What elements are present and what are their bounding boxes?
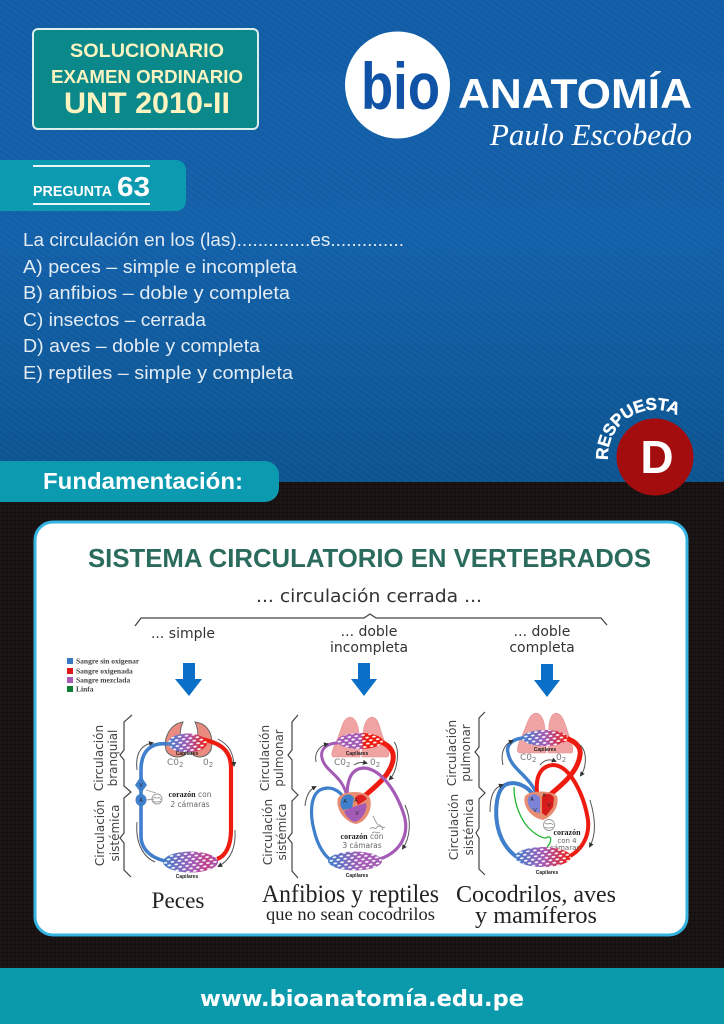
capillary labels: cocodrilos: Capilares — [536, 870, 558, 876]
type labels — [151, 624, 575, 656]
gas labels: peces: 2 — [209, 761, 213, 769]
heart label: anfibios — [341, 832, 384, 850]
side labels: cocodrilos: sistémica — [462, 799, 476, 855]
species label: peces: Peces — [152, 888, 205, 913]
type labels: ... doble — [514, 624, 570, 640]
side labels: anfibios: Circulación — [258, 725, 272, 791]
fundamentación tab — [0, 461, 279, 502]
circuit: cocodrilos — [496, 737, 588, 860]
logo: bioanatomía: ANATOMÍA — [458, 70, 692, 117]
question text: E) reptiles – simple y completa — [23, 363, 294, 383]
side labels: cocodrilos — [445, 720, 476, 860]
legend: Sangre sin oxigenar — [76, 656, 140, 666]
side labels: peces: sistémica — [108, 805, 122, 861]
diagram: anfibios y reptiles — [258, 715, 439, 924]
brace: anfibios — [288, 715, 298, 878]
blue upper background — [0, 0, 724, 483]
exam title box: EXAMEN ORDINARIO — [51, 67, 243, 87]
heart: cocodrilos — [524, 792, 558, 820]
gas labels: cocodrilos — [520, 753, 566, 764]
circuit: anfibios — [312, 738, 406, 861]
capillary labels: cocodrilos — [534, 747, 558, 876]
heart label: peces — [169, 790, 212, 809]
side labels: cocodrilos: Circulación — [447, 794, 461, 860]
dark lower background — [0, 482, 724, 969]
species label: cocodrilos: Cocodrilos, aves — [456, 882, 616, 908]
diagram: cocodrilos, aves y mamíferos — [445, 712, 616, 929]
logo: bioanatomía: bio — [361, 49, 440, 123]
heart: anfibios: A — [343, 799, 347, 805]
body capillaries — [163, 852, 218, 872]
arrow: doble incompleta — [351, 663, 377, 696]
heart chambers: peces: V — [139, 783, 143, 789]
side labels: anfibios: pulmonar — [272, 729, 286, 787]
logo: bioanatomía — [345, 32, 692, 152]
flow arrows: peces — [137, 739, 235, 866]
fundamentación tab: Fundamentación: — [43, 468, 243, 494]
gas labels: peces — [167, 758, 213, 769]
species label: cocodrilos — [456, 882, 616, 929]
heart label: cocodrilos — [550, 828, 581, 852]
side labels: anfibios: sistémica — [275, 804, 289, 860]
side labels: peces — [92, 725, 122, 866]
organ icon: anfibios — [370, 816, 385, 833]
capillary labels: anfibios: Capilares — [346, 873, 368, 879]
question number tab: PREGUNTA — [33, 184, 113, 200]
body capillaries: cocodrilos — [515, 847, 571, 867]
legend: Sangre mezclada — [76, 676, 130, 684]
exam title box: SOLUCIONARIO — [70, 40, 224, 62]
heart label: cocodrilos: corazón — [553, 828, 581, 837]
species label: anfibios: Anfibios y reptiles — [262, 881, 439, 908]
circuit: peces — [141, 744, 168, 861]
question text: D) aves – doble y completa — [23, 336, 261, 356]
heart: cocodrilos: V — [547, 803, 551, 809]
heart chambers: peces — [135, 776, 147, 806]
side labels: peces: Circulación — [92, 725, 106, 791]
subheading: ... circulación cerrada ... — [256, 586, 482, 607]
gas labels: cocodrilos: 2 — [562, 756, 566, 764]
organ icon: peces — [146, 790, 162, 804]
heart chambers: peces: A — [139, 798, 143, 804]
heart label: anfibios: corazón con — [341, 832, 384, 841]
heart: anfibios — [337, 792, 371, 824]
gas labels: peces: 0 — [203, 758, 209, 768]
heart: cocodrilos: A — [530, 797, 534, 803]
side labels: anfibios — [258, 725, 289, 865]
diagram: peces — [92, 715, 235, 913]
side labels: peces: Circulación — [93, 800, 107, 866]
gas labels: anfibios: 2 — [376, 761, 380, 769]
species label: anfibios — [262, 881, 439, 924]
answer badge — [596, 398, 694, 496]
organ icon: cocodrilos — [544, 820, 554, 830]
side labels: peces: branquial — [106, 730, 120, 786]
panel heading: SISTEMA CIRCULATORIO EN VERTEBRADOS — [88, 543, 651, 573]
species label: anfibios: que no sean cocodrilos — [266, 904, 435, 924]
species label: cocodrilos: y mamíferos — [475, 903, 597, 929]
side labels: cocodrilos: Circulación — [445, 720, 459, 786]
answer badge: RESPUESTA — [596, 398, 678, 460]
heart: cocodrilos: A — [542, 793, 546, 799]
type labels: ... doble — [341, 624, 397, 640]
arrow: simple — [175, 663, 202, 696]
logo: bioanatomía: Paulo Escobedo — [489, 117, 692, 152]
gas labels: anfibios: 2 — [346, 761, 350, 769]
footer — [0, 968, 724, 1024]
heart label: cocodrilos: cámaras — [550, 844, 580, 852]
footer: www.bioanatomía.edu.pe — [200, 986, 524, 1012]
exam title box: UNT 2010-II — [64, 87, 230, 120]
question number tab: 63 — [117, 171, 150, 202]
gas labels: peces: C0 — [167, 758, 179, 768]
gas labels: peces: 2 — [179, 761, 183, 769]
legend — [67, 656, 140, 694]
capillary labels: anfibios — [346, 751, 368, 879]
arrow: doble completa — [534, 664, 560, 697]
heart label: cocodrilos: con 4 — [557, 837, 577, 845]
side labels: cocodrilos: pulmonar — [459, 724, 473, 782]
flow arrows: anfibios — [305, 742, 409, 848]
gill capillaries — [168, 734, 207, 752]
gas labels: cocodrilos: 0 — [556, 753, 562, 763]
main brace — [135, 614, 607, 626]
heart label: peces: corazón con — [169, 790, 212, 799]
question text: C) insectos – cerrada — [23, 310, 207, 330]
question number tab — [0, 160, 186, 211]
gas labels: cocodrilos: 2 — [532, 756, 536, 764]
heart: cocodrilos: V — [533, 808, 537, 814]
legend: Linfa — [76, 684, 94, 694]
exam title box — [33, 29, 258, 129]
brace: peces — [120, 715, 132, 877]
answer badge: D — [640, 431, 674, 483]
body capillaries: anfibios — [328, 852, 382, 870]
question text — [23, 230, 404, 383]
type labels: ... simple — [151, 626, 215, 642]
gas labels: cocodrilos: C0 — [520, 753, 532, 763]
legend: Sangre oxigenada — [76, 666, 133, 676]
gills — [165, 722, 212, 757]
lung capillaries: cocodrilos — [522, 730, 568, 746]
gas labels: anfibios — [334, 758, 380, 769]
panel: sistema circulatorio — [35, 522, 687, 935]
capillary labels: peces: Capilares — [176, 751, 198, 757]
lung capillaries: anfibios — [337, 733, 383, 749]
side labels: anfibios: Circulación — [261, 799, 275, 865]
lymph vessel — [514, 787, 551, 847]
gas labels: anfibios: 0 — [370, 758, 376, 768]
heart: anfibios: A — [354, 798, 358, 804]
question text: La circulación en los (las)..............es.............. — [23, 230, 404, 250]
capillary labels: peces — [176, 751, 198, 880]
brace: cocodrilos — [475, 712, 485, 875]
question text: A) peces – simple e incompleta — [23, 257, 298, 277]
heart label: peces: 2 cámaras — [170, 800, 210, 809]
capillary labels: anfibios: Capilares — [346, 751, 368, 757]
capillary labels: cocodrilos: Capilares — [534, 747, 556, 753]
type labels: incompleta — [330, 640, 408, 656]
gas labels: anfibios: C0 — [334, 758, 346, 768]
type labels: completa — [509, 640, 575, 656]
flow arrows: cocodrilos — [490, 741, 594, 846]
lungs: cocodrilos — [517, 713, 573, 753]
lungs: anfibios — [332, 717, 389, 757]
heart label: anfibios: 3 cámaras — [342, 841, 382, 850]
capillary labels: peces: Capilares — [176, 874, 198, 880]
heart: anfibios: V — [355, 811, 359, 817]
question text: B) anfibios – doble y completa — [23, 283, 291, 303]
